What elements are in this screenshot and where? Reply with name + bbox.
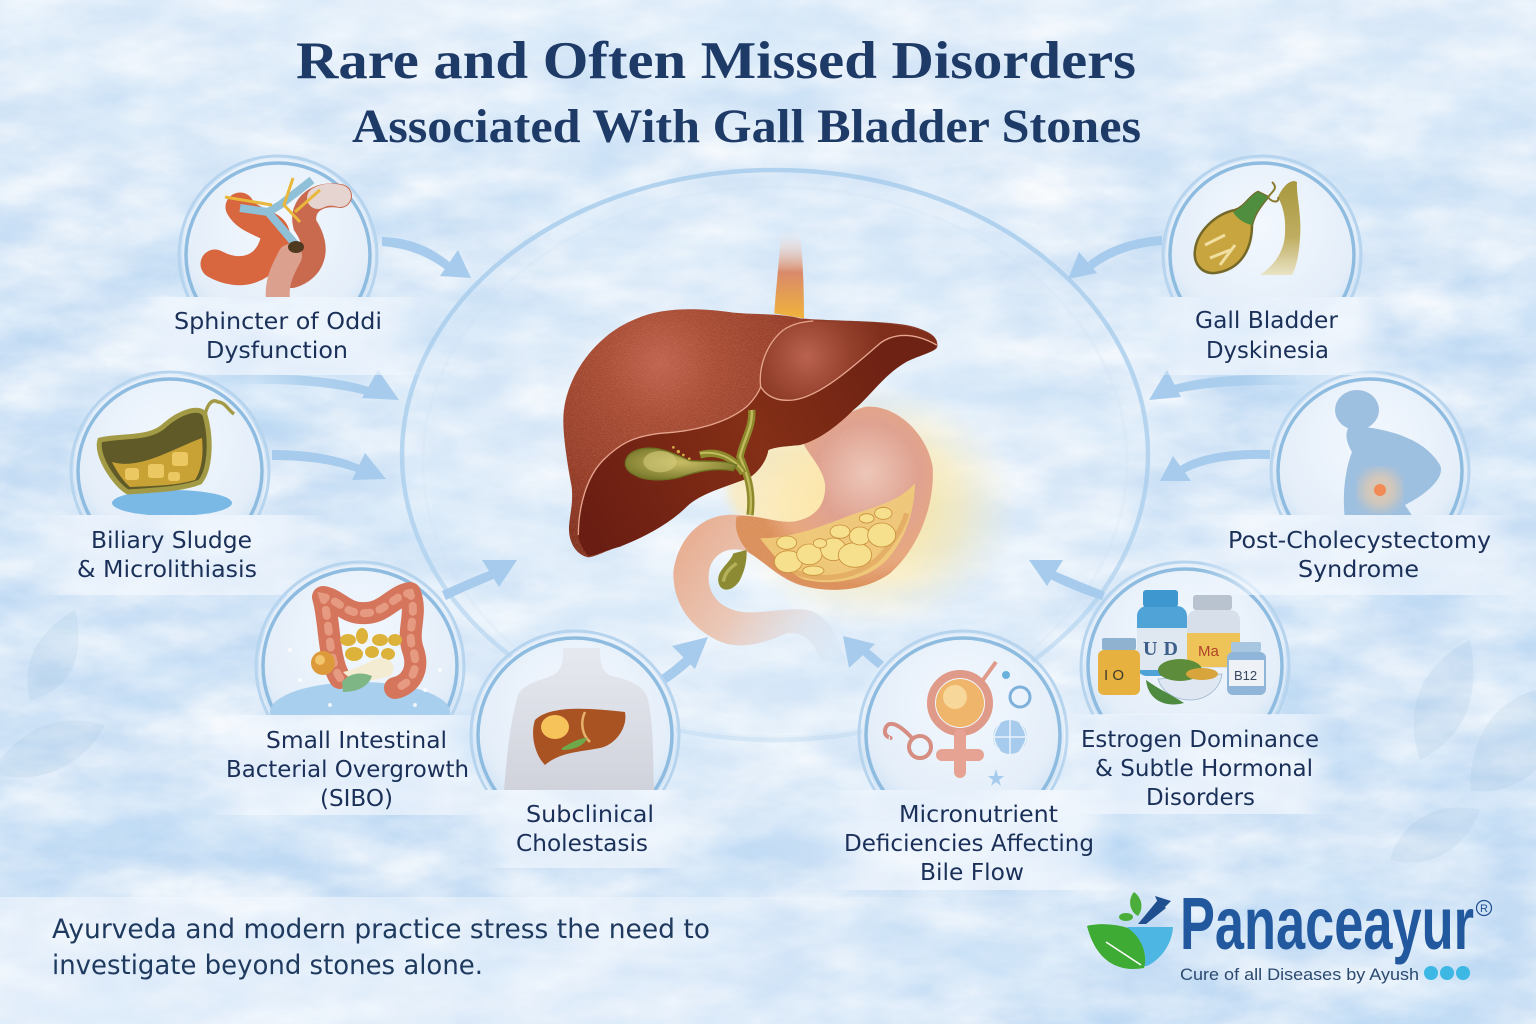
arrows pointing to central organs <box>235 236 1310 684</box>
icon: supplement bottles: Ma <box>1198 643 1219 660</box>
label: & Subtle Hormonal <box>1095 754 1313 782</box>
label: Estrogen Dominance <box>1081 725 1319 753</box>
label: Deficiencies Affecting <box>844 829 1094 857</box>
label <box>226 726 469 812</box>
footer note: investigate beyond stones alone. <box>52 950 483 981</box>
warm glow behind stomach <box>727 383 1020 630</box>
label: (SIBO) <box>320 784 393 812</box>
label band <box>820 790 1120 890</box>
arrow: upper right <box>1149 370 1310 400</box>
panel: Estrogen Dominance <box>1080 560 1330 814</box>
icon: supplement bottles: UD <box>1143 638 1178 660</box>
icon: gall bladder with sludge <box>70 370 270 515</box>
label: Disorders <box>1146 783 1255 811</box>
label: & Microlithiasis <box>77 555 257 583</box>
panel: Post-Cholecystectomy Syndrome <box>1200 372 1520 595</box>
label: Biliary Sludge <box>91 526 252 554</box>
label: Small Intestinal <box>266 726 447 754</box>
label: Post-Cholecystectomy <box>1228 526 1491 554</box>
label band <box>130 297 430 375</box>
footer note: Ayurveda and modern practice stress the need to <box>52 914 710 945</box>
panel: Micronutrient Deficiencies <box>820 631 1120 890</box>
label <box>1228 526 1491 583</box>
label: Gall Bladder <box>1195 306 1338 334</box>
registered mark: R <box>1480 903 1488 915</box>
arrow: Subclinical <box>660 637 708 684</box>
stomach <box>736 407 933 590</box>
label <box>1081 725 1319 811</box>
tagline: Cure of all Diseases by Ayush <box>1180 965 1419 984</box>
registered mark <box>1476 900 1492 916</box>
icon: supplement bottles <box>1080 560 1290 715</box>
central illustration: liver, gall bladder and stomach <box>563 227 1020 663</box>
label: Bile Flow <box>920 858 1024 886</box>
arrow: Gall Bladder <box>1068 236 1162 279</box>
arrow: Biliary Sludge <box>272 450 386 480</box>
gall bladder and bile ducts <box>625 410 752 515</box>
arrow: Estrogen <box>1029 560 1105 600</box>
label: Micronutrient <box>899 800 1058 828</box>
icon: torso with inflamed liver <box>470 630 680 790</box>
title: Associated With Gall Bladder Stones <box>352 100 1141 153</box>
panel: Biliary Sludge & Microlithiasis <box>35 372 325 595</box>
icon: supplement bottles: B12 <box>1234 668 1257 683</box>
label: Dyskinesia <box>1206 336 1329 364</box>
label <box>516 800 654 857</box>
panel: Subclinical Cholestasis <box>471 631 690 868</box>
label: Dysfunction <box>206 336 348 364</box>
icon: hormone symbols <box>858 630 1068 790</box>
icon: sphincter of Oddi anatomy <box>178 154 378 297</box>
label: Bacterial Overgrowth <box>226 755 469 783</box>
label: Subclinical <box>526 800 654 828</box>
label band <box>1200 515 1520 595</box>
panel: Sphincter of Oddi Dysfunction <box>130 156 430 375</box>
label: Syndrome <box>1298 555 1419 583</box>
label <box>844 800 1094 886</box>
icon: mortar, pestle and leaf <box>1087 892 1173 969</box>
label band <box>480 790 690 868</box>
label band <box>1150 297 1390 375</box>
footer band <box>0 897 1080 1024</box>
duodenum tube <box>673 515 845 663</box>
dots <box>1424 966 1470 980</box>
panel: Gall Bladder Dyskinesia <box>1150 156 1390 375</box>
esophagus pipe <box>774 227 804 318</box>
arrow: Sphincter of Oddi <box>382 237 471 278</box>
arrow: Micronutrient <box>843 636 884 668</box>
panel: Small Intestinal Bacterial Overgrowth <box>205 562 490 815</box>
large central ring <box>402 170 1148 740</box>
label band <box>1060 714 1340 814</box>
label <box>174 307 382 364</box>
title <box>296 32 1141 153</box>
logo: Panaceayur <box>1087 882 1492 984</box>
label <box>1195 306 1338 364</box>
gallstones in stomach <box>774 507 896 575</box>
liver <box>563 309 937 557</box>
arrow: SIBO <box>442 560 517 600</box>
label: Sphincter of Oddi <box>174 307 382 335</box>
icon: gall bladder with twisted duct <box>1162 154 1362 297</box>
label <box>77 526 257 583</box>
footer note <box>52 914 710 981</box>
title: Rare and Often Missed Disorders <box>296 32 1136 90</box>
arrow: upper left <box>235 370 399 400</box>
label band <box>35 515 325 595</box>
icon: colon with bacteria <box>254 560 466 715</box>
icon: person holding abdomen <box>1270 370 1470 515</box>
icon: supplement bottles: I O <box>1104 667 1124 684</box>
lower bile duct and small bulb <box>718 550 747 590</box>
label: Cholestasis <box>516 829 648 857</box>
arrow: Post-Cholecystectomy <box>1160 450 1270 481</box>
label band <box>205 715 490 815</box>
